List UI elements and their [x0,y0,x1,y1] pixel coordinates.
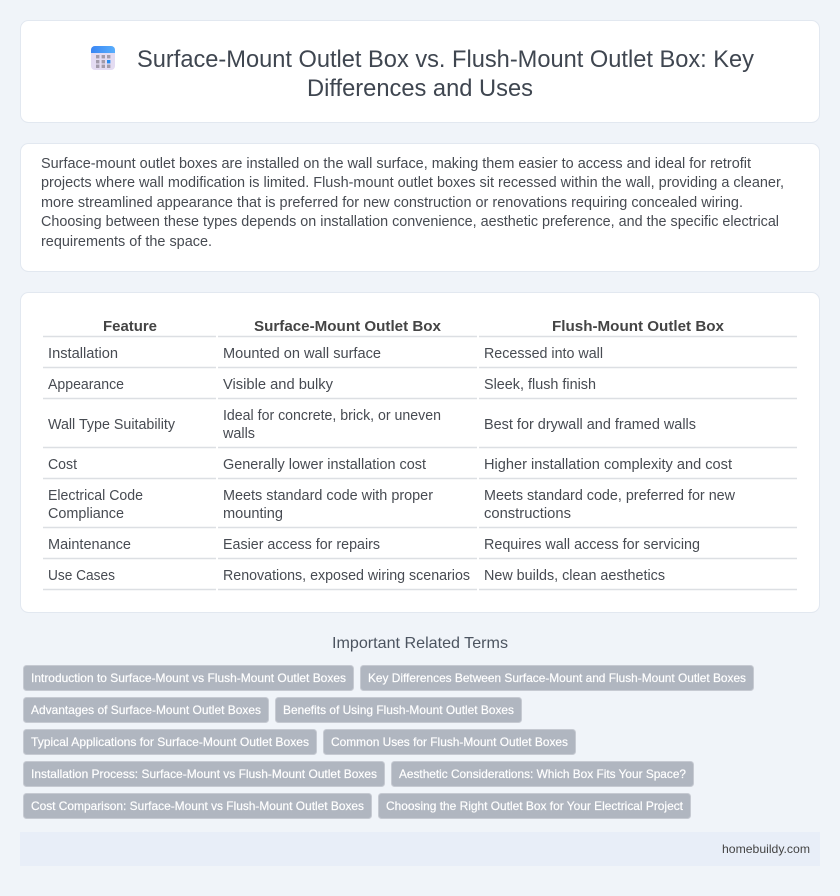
row: cost: Higher installation complexity and cost [484,457,732,473]
tag [24,794,372,818]
row: use cases: Use Cases [48,568,115,584]
row: appearance: Sleek, flush finish [484,377,596,393]
heading: important related terms: Important Related Terms [332,635,508,652]
tag: Benefits of Using Flush-Mount Outlet Boxes [283,703,514,717]
row: wall type suitability: walls [222,426,255,442]
tag [324,730,576,754]
intro text block: more streamlined appearance that is preferred for new construction or renovations requiring concealed wiring. [41,195,743,211]
tag [24,666,354,690]
row: wall type suitability: Wall Type Suitability [48,417,176,433]
tag: Common Uses for Flush-Mount Outlet Boxes [331,735,568,749]
page header panel [20,20,820,122]
row: use cases: New builds, clean aesthetics [484,568,665,584]
row: electrical code compliance: Electrical Code [48,488,143,504]
row: wall type suitability: Ideal for concrete, brick, or uneven [223,408,441,424]
title: Surface-Mount Outlet Box vs. Flush-Mount Outlet Box: Key [137,46,754,73]
intro text block: projects where wall modification is limited. Flush-mount outlet boxes sit recessed within the wall, providing a cleaner, [41,175,784,191]
row: cost [48,457,732,473]
tag [24,762,384,786]
panel: introduction [20,144,820,272]
intro text block: Choosing between these types depends on installation convenience, aesthetic preference, and the specific electrical [41,214,779,230]
row: electrical code compliance: Meets standard code with proper [223,488,433,504]
tag: Key Differences Between Surface-Mount and Flush-Mount Outlet Boxes [368,671,746,685]
row: electrical code compliance: Compliance [48,506,124,522]
tag: Choosing the Right Outlet Box for Your Electrical Project [386,799,684,813]
row: use cases: Renovations, exposed wiring scenarios [223,568,470,584]
table header row: Feature [103,319,157,335]
tag: Advantages of Surface-Mount Outlet Boxes [31,703,261,717]
row: installation: Installation [48,346,118,362]
row: installation: Mounted on wall surface [223,346,381,362]
tag: Cost Comparison: Surface-Mount vs Flush-Mount Outlet Boxes [31,799,364,813]
title [137,46,754,102]
icon: calendar grid [91,46,115,70]
row: appearance: Appearance [48,377,124,393]
tag [276,698,522,722]
table header row: Flush-Mount Outlet Box [552,319,724,335]
title: Differences and Uses [307,75,533,102]
tag [360,666,754,690]
intro text block: requirements of the space. [41,234,212,250]
tag: Typical Applications for Surface-Mount Outlet Boxes [31,735,309,749]
row: wall type suitability [48,408,696,442]
table header row: Surface-Mount Outlet Box [254,319,441,335]
row: use cases [48,568,665,584]
row: electrical code compliance: mounting [223,506,283,522]
row: appearance [48,377,596,393]
row: installation: Recessed into wall [484,346,603,362]
tag [24,698,268,722]
intro text block: Surface-mount outlet boxes are installed on the wall surface, making them easier to access and ideal for retrofit [41,156,751,172]
row: maintenance [48,537,700,553]
row: maintenance: Maintenance [48,537,131,553]
row: maintenance: Requires wall access for servicing [484,537,700,553]
row: electrical code compliance [48,488,736,522]
row: cost: Cost [48,457,77,473]
related term tags [24,666,754,818]
row: appearance: Visible and bulky [223,377,334,393]
tag: Introduction to Surface-Mount vs Flush-Mount Outlet Boxes [31,671,346,685]
table header row [103,319,724,335]
intro text block [41,156,784,250]
row: installation [48,346,603,362]
tag [378,794,690,818]
tag: Aesthetic Considerations: Which Box Fits Your Space? [399,767,686,781]
panel: comparison table [20,292,820,612]
tag [24,730,316,754]
footer site name: homebuildy.com [722,842,810,856]
row: maintenance: Easier access for repairs [223,537,380,553]
row: cost: Generally lower installation cost [223,457,426,473]
tag [392,762,694,786]
row: wall type suitability: Best for drywall and framed walls [484,417,696,433]
row: electrical code compliance: constructions [484,506,571,522]
row: electrical code compliance: Meets standard code, preferred for new [484,488,736,504]
tag: Installation Process: Surface-Mount vs Flush-Mount Outlet Boxes [31,767,377,781]
footer bar [20,832,820,866]
